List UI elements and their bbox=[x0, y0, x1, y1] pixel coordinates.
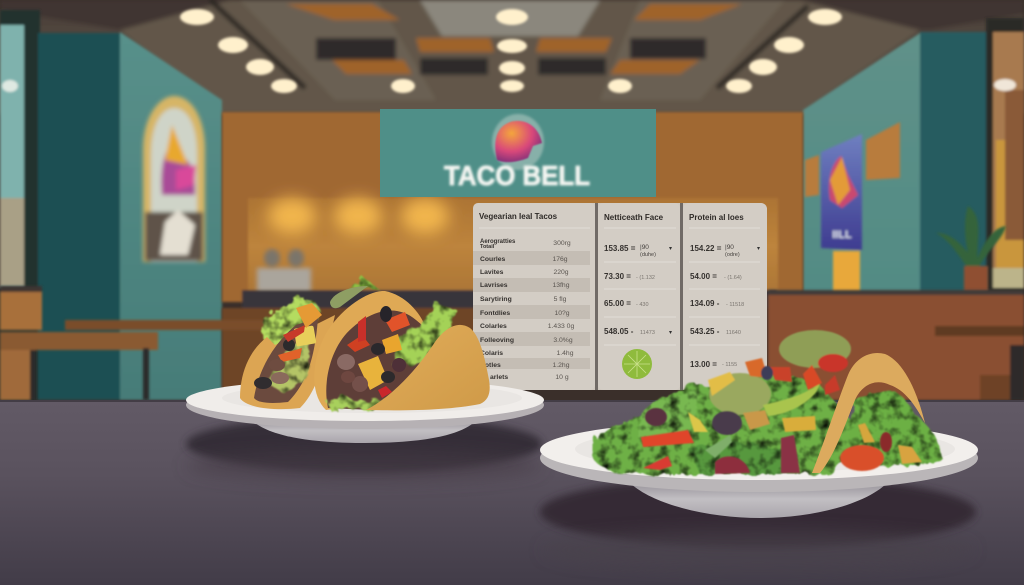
column 2: Nutrition Face: ▾ bbox=[669, 246, 672, 252]
plate bbox=[186, 379, 544, 443]
column 1: Vegetarian Ideal Tacos: 10?g bbox=[554, 310, 570, 317]
restaurant background bbox=[0, 0, 1024, 400]
column 3: Protein Ideas: - 1155 bbox=[722, 362, 737, 368]
front taco bbox=[314, 276, 490, 410]
left wall poster bbox=[143, 96, 205, 262]
salad toppings bbox=[641, 330, 922, 474]
column 3: Protein Ideas: - 11518 bbox=[726, 302, 744, 308]
column 1: Vegetarian Ideal Tacos: 10 g bbox=[555, 374, 569, 381]
column 2: Nutrition Face bbox=[598, 203, 680, 390]
column 3: Protein Ideas bbox=[683, 203, 767, 390]
column 1: Vegetarian Ideal Tacos: Sarytiring bbox=[480, 296, 512, 303]
column 3: Protein Ideas: 134.09 - bbox=[690, 299, 720, 308]
plant bbox=[936, 206, 1006, 292]
column 2: Nutrition Face: 548.05 - bbox=[604, 327, 634, 336]
column 1: Vegetarian Ideal Tacos: 176g bbox=[552, 256, 568, 263]
Taco Bell sign: TACO BELL bbox=[444, 160, 590, 191]
column 2: Nutrition Face: 11473 bbox=[640, 330, 655, 336]
left plate with tacos bbox=[186, 276, 544, 443]
icon: lime slice bbox=[622, 349, 652, 379]
column 2: Nutrition Face: ▾ bbox=[669, 330, 672, 336]
column 1: Vegetarian Ideal Tacos: arlets bbox=[490, 374, 508, 381]
column 3: Protein Ideas: ▾ bbox=[757, 246, 760, 252]
column 1: Vegetarian Ideal Tacos: Cotles bbox=[480, 362, 501, 369]
left wall bbox=[0, 10, 222, 400]
table surface bbox=[0, 400, 1024, 585]
column 1: Vegetarian Ideal Tacos: 1.4hg bbox=[556, 350, 574, 357]
back taco bbox=[240, 298, 335, 409]
column 2: Nutrition Face: - 430 bbox=[636, 302, 649, 308]
column 1: Vegetarian Ideal Tacos: 220g bbox=[553, 269, 569, 276]
column 1: Vegetarian Ideal Tacos: Colarles bbox=[480, 323, 507, 330]
tortilla shell bbox=[812, 353, 925, 473]
column 1: Vegetarian Ideal Tacos: Totail bbox=[480, 244, 495, 250]
column 1: Vegetarian Ideal Tacos bbox=[473, 203, 595, 390]
right plate with taco salad bbox=[540, 330, 978, 518]
column 1: Vegetarian Ideal Tacos: Folleoving bbox=[480, 337, 514, 344]
column 2: Nutrition Face: |90 bbox=[640, 244, 649, 251]
plate shadow left bbox=[186, 416, 542, 472]
column 1: Vegetarian Ideal Tacos: 5 flg bbox=[554, 296, 567, 303]
back wall bbox=[222, 112, 803, 400]
column 3: Protein Ideas: 11640 bbox=[726, 330, 741, 336]
column 3: Protein Ideas: 543.25 - bbox=[690, 327, 720, 336]
column 1: Vegetarian Ideal Tacos: Lavrises bbox=[480, 282, 508, 289]
plate shadow right bbox=[540, 476, 976, 548]
column 2: Nutrition Face: Netticeath Face bbox=[604, 213, 664, 222]
column 2: Nutrition Face: 65.00 = bbox=[604, 299, 631, 308]
column divider bbox=[680, 203, 683, 390]
column 1: Vegetarian Ideal Tacos: Courles bbox=[480, 256, 506, 263]
right wall bbox=[803, 18, 1024, 295]
column 1: Vegetarian Ideal Tacos: 1.2hg bbox=[552, 362, 570, 369]
column 1: Vegetarian Ideal Tacos: 3.0%g bbox=[553, 337, 573, 344]
filling bbox=[326, 311, 440, 410]
column 1: Vegetarian Ideal Tacos: Lavites bbox=[480, 269, 504, 276]
shell back band bbox=[314, 291, 426, 410]
column divider bbox=[595, 203, 598, 390]
salad greens bbox=[590, 375, 942, 474]
column 1: Vegetarian Ideal Tacos: Aerogratties bbox=[480, 239, 516, 245]
ceiling lights bbox=[180, 9, 842, 93]
counters bbox=[0, 286, 1024, 400]
column 1: Vegetarian Ideal Tacos: Fontdlies bbox=[480, 310, 510, 317]
column 3: Protein Ideas: 154.22 = bbox=[690, 244, 722, 253]
column 2: Nutrition Face: 153.85 = bbox=[604, 244, 636, 253]
column 3: Protein Ideas: |90 bbox=[725, 244, 734, 251]
avocado and top lettuce bbox=[352, 276, 378, 290]
column 1: Vegetarian Ideal Tacos: 1.433 0g bbox=[548, 323, 574, 330]
column 2: Nutrition Face: 73.30 = bbox=[604, 272, 631, 281]
column 1: Vegetarian Ideal Tacos: Colaris bbox=[480, 350, 503, 357]
ceiling bbox=[0, 0, 1024, 114]
plate bbox=[540, 420, 978, 518]
column 3: Protein Ideas: 54.00 = bbox=[690, 272, 717, 281]
lettuce bbox=[392, 303, 457, 365]
Taco Bell sign bbox=[380, 109, 656, 197]
nutrition panel bbox=[473, 203, 767, 390]
column 3: Protein Ideas: Protein al loes bbox=[689, 213, 744, 222]
column 1: Vegetarian Ideal Tacos: Vegearian Ieal Tacos bbox=[479, 212, 558, 221]
column 3: Protein Ideas: 13.00 = bbox=[690, 360, 717, 369]
right wall poster bbox=[805, 122, 900, 295]
column 2: Nutrition Face: - (1.132 bbox=[636, 275, 655, 281]
column 1: Vegetarian Ideal Tacos: 13fhg bbox=[552, 282, 570, 289]
column 2: Nutrition Face: (duhe) bbox=[640, 252, 656, 258]
column 3: Protein Ideas: - (1.64) bbox=[724, 275, 742, 281]
column 1: Vegetarian Ideal Tacos: 300rg bbox=[553, 240, 571, 247]
column 3: Protein Ideas: (odre) bbox=[725, 252, 740, 258]
right wall poster: IILL bbox=[832, 229, 852, 241]
lettuce bbox=[264, 298, 320, 350]
